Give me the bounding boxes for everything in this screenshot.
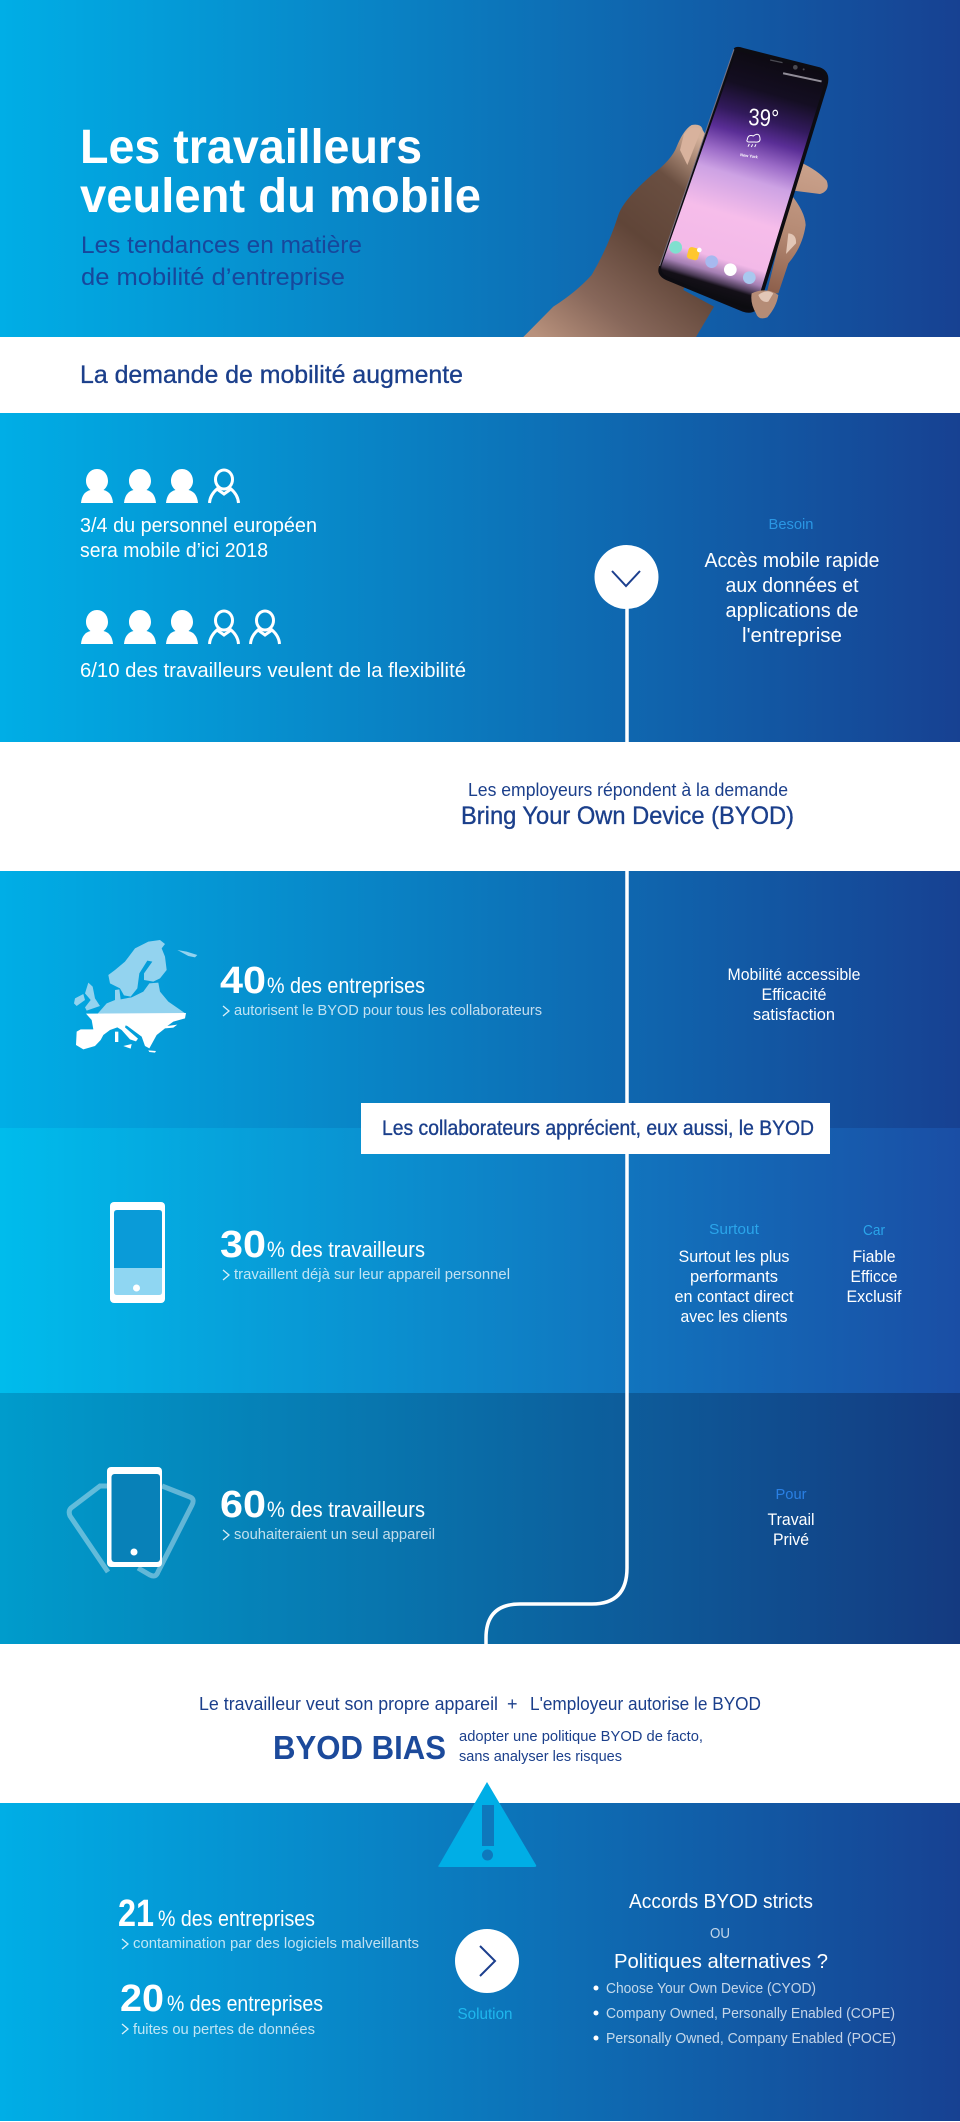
stat: 30: % des travailleurs: [267, 1237, 425, 1262]
column: surtout: performants: [690, 1267, 778, 1286]
front finger: [751, 290, 778, 318]
icon: phone with stacked devices: [69, 1467, 193, 1576]
equation text: L'employeur autorise le BYOD: [530, 1694, 761, 1714]
northern Europe, light half: [74, 940, 197, 1014]
panel: hero: [0, 0, 960, 337]
panel: demand: [0, 413, 960, 742]
stat: 40: % des entreprises: [267, 973, 425, 998]
stat: 3/4: 3/4 du personnel européen: [80, 515, 317, 537]
definition: [459, 1728, 703, 1765]
need text: l'entreprise: [742, 625, 842, 647]
need text: [704, 550, 880, 647]
panel: 30 percent: [0, 1128, 960, 1393]
panel: 40 percent: [0, 871, 960, 1128]
callout: collaborators: Les collaborateurs apprécient, eux aussi, le BYOD: [382, 1117, 814, 1140]
column: car: Fiable: [852, 1247, 896, 1266]
icon: warning triangle: [438, 1782, 536, 1867]
heading band: la demande: [0, 337, 960, 413]
stat: 40: 40: [220, 960, 266, 1002]
stat: 21: contamination par des logiciels malveillants: [133, 1935, 419, 1952]
benefits: Mobilité accessible: [728, 965, 860, 984]
phone body and screen: [658, 47, 828, 313]
stat: 30: 30: [220, 1224, 266, 1266]
subtitle: [81, 232, 362, 291]
alternatives heading: Politiques alternatives ?: [614, 1951, 828, 1973]
need label: Besoin: [768, 516, 814, 533]
solution heading: Accords BYOD stricts: [629, 1891, 813, 1913]
column: car: [846, 1222, 902, 1306]
band: employers: [0, 742, 960, 871]
stat: 60: % des travailleurs: [267, 1497, 425, 1522]
subtitle: de mobilité d’entreprise: [81, 264, 345, 291]
stat: 60: 60: [220, 1484, 266, 1526]
column: surtout: [674, 1221, 794, 1326]
icon: 3 of 4 people: [81, 469, 238, 503]
title: [80, 121, 481, 223]
text: employers respond: Les employeurs répondent à la demande: [468, 780, 788, 800]
phone app icons: [669, 241, 756, 284]
stat: 21: [118, 1893, 419, 1952]
callout: collaborators: [361, 1103, 830, 1154]
stat: 20: 20: [120, 1978, 164, 2020]
title: veulent du mobile: [80, 170, 481, 223]
column: surtout: Surtout les plus: [678, 1247, 790, 1266]
equation text: [199, 1694, 761, 1714]
need text: Accès mobile rapide: [704, 550, 880, 572]
title: Les travailleurs: [80, 121, 422, 174]
need text: aux données et: [726, 575, 859, 597]
panel: risks and solution: [0, 1803, 960, 2121]
stat: 40: [220, 960, 542, 1019]
icon: down chevron circle: [594, 545, 658, 609]
alternatives list: Company Owned, Personally Enabled (COPE): [606, 2005, 895, 2022]
benefits: Efficacité: [762, 985, 826, 1004]
weather icon: [747, 134, 760, 147]
phone location text: New York: [740, 152, 759, 160]
or: OU: [710, 1925, 730, 1942]
fingers behind the phone: [767, 162, 828, 293]
stat: 6/10: 6/10 des travailleurs veulent de la flexibilité: [80, 660, 466, 682]
stat: 40: autorisent le BYOD pour tous les collaborateurs: [234, 1002, 542, 1019]
heading: BYOD: Bring Your Own Device (BYOD): [461, 802, 794, 830]
column: car: Efficce: [850, 1267, 898, 1286]
band: BYOD bias: [0, 1644, 960, 1803]
column: pour: Privé: [773, 1530, 809, 1549]
equation text: +: [507, 1694, 518, 1714]
fingernails: [758, 233, 796, 302]
alternatives list: [594, 1980, 896, 2047]
heading: La demande de mobilité augmente: [80, 361, 463, 389]
stat: 3/4: sera mobile d’ici 2018: [80, 540, 268, 562]
stat: 21: % des entreprises: [158, 1906, 315, 1931]
definition: sans analyser les risques: [459, 1748, 622, 1765]
stat: 30: travaillent déjà sur leur appareil personnel: [234, 1266, 510, 1283]
stat: 20: [120, 1978, 323, 2038]
icon: 6 of 10 people: [81, 610, 280, 644]
column: car: Exclusif: [846, 1287, 902, 1306]
alternatives list: Personally Owned, Company Enabled (POCE): [606, 2030, 896, 2047]
need text: applications de: [726, 600, 858, 622]
panel: 60 percent: [0, 1393, 960, 1644]
thumb tip: [680, 127, 701, 165]
subtitle: Les tendances en matière: [81, 232, 362, 259]
benefits: satisfaction: [753, 1005, 835, 1024]
solution label: Solution: [458, 2006, 512, 2023]
alternatives list: Choose Your Own Device (CYOD): [606, 1980, 816, 1997]
column: surtout: avec les clients: [680, 1307, 788, 1326]
stat: 30: [220, 1224, 510, 1283]
stat: 3/4: [80, 515, 317, 562]
stat: 20: fuites ou pertes de données: [133, 2021, 315, 2038]
column: pour: Travail: [768, 1510, 814, 1529]
column: pour: [768, 1486, 814, 1549]
stat: 21: 21: [118, 1893, 154, 1935]
stat: 60: [220, 1484, 435, 1543]
phone speaker and status bar: [770, 59, 822, 82]
image: hand holding phone: [523, 47, 828, 337]
heading: BYOD BIAS: BYOD BIAS: [273, 1729, 446, 1766]
hand and wrist: [523, 125, 723, 337]
phone left edge highlight: [660, 49, 734, 266]
phone clock: 39°: [748, 104, 780, 133]
equation text: Le travailleur veut son propre appareil: [199, 1694, 498, 1714]
column: surtout: Surtout: [709, 1221, 760, 1238]
connector line: [486, 600, 627, 1644]
stat: 20: % des entreprises: [167, 1991, 323, 2016]
stat: 60: souhaiteraient un seul appareil: [234, 1526, 435, 1543]
column: car: Car: [863, 1222, 885, 1239]
icon: phone: [110, 1202, 165, 1303]
icon: Europe map: [74, 940, 197, 1053]
definition: adopter une politique BYOD de facto,: [459, 1728, 703, 1745]
column: surtout: en contact direct: [674, 1287, 794, 1306]
icon: right chevron circle: [455, 1929, 519, 1993]
column: pour: Pour: [776, 1486, 807, 1503]
benefits: [728, 965, 860, 1024]
southern Europe, white half: [76, 1013, 186, 1053]
